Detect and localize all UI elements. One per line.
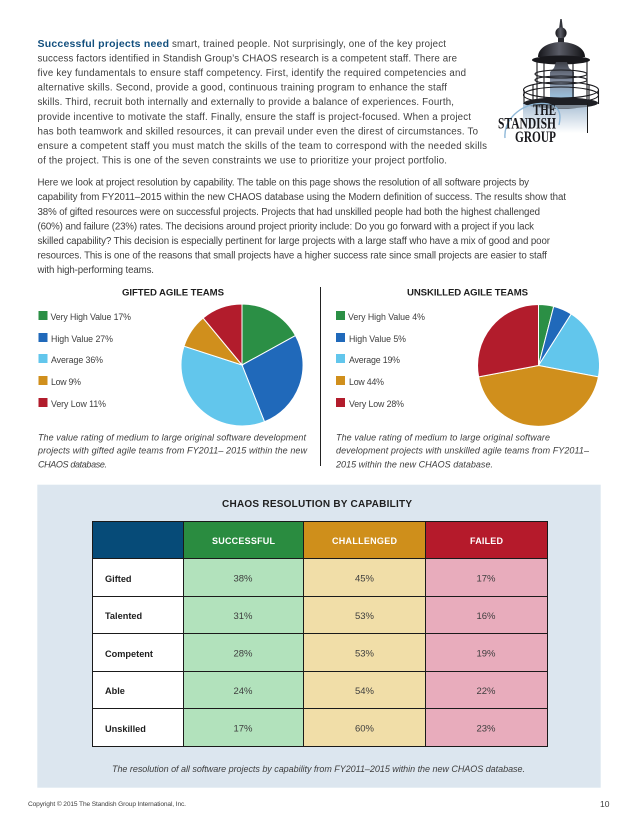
table values: 19% [476, 648, 496, 660]
table values: 28% [233, 648, 253, 660]
caption: unskilled: 2015 within the new CHAOS database. [335, 460, 493, 470]
caption: gifted: projects with gifted agile teams from FY2011– 2015 within the new [37, 446, 308, 456]
text block: intro paragraph: Successful projects need [38, 38, 169, 50]
footer: copyright: Copyright © 2015 The Standish Group International, Inc. [28, 800, 186, 808]
panel: CHAOS resolution by capability [37, 485, 601, 788]
table values: 53% [355, 611, 375, 622]
legend: unskilled: Very Low 28% [349, 399, 404, 409]
text block: intro paragraph: alternative skills. Second, provide a good, continuous training program to enhance the staff [38, 82, 447, 94]
text block: intro paragraph: provide incentive to motivate the staff. Finally, ensure the staff is project-focused. When a project [38, 112, 471, 123]
table header: FAILED [470, 536, 504, 546]
table values: 53% [355, 648, 375, 660]
caption: unskilled [335, 432, 590, 470]
legend: unskilled: Average 19% [349, 355, 400, 365]
table values [233, 574, 496, 734]
text block: capability paragraph: 38% of gifted resources were on successful projects. Projects that had unskilled people had both the highest challenged [38, 207, 540, 218]
legend: unskilled: Very High Value 4% [348, 312, 425, 322]
text block: intro paragraph: smart, trained people. Not surprisingly, one of the key project [172, 39, 446, 50]
row labels [105, 574, 153, 734]
text block: capability paragraph: with high-performing teams. [36, 265, 154, 276]
text block: capability paragraph: (60%) and failure (23%) rates. The decisions around project priority include: Do you go forward with a project if you lack [38, 222, 534, 232]
table: resolution by capability [92, 522, 548, 746]
table values: 23% [476, 724, 496, 734]
text block: capability paragraph: Here we look at project resolution by capability. The table on this page shows the resolution of all software projects by [38, 178, 529, 188]
row labels: Competent [105, 649, 153, 659]
table values: 54% [355, 686, 375, 697]
footer: page number: 10 [600, 799, 610, 809]
legend: unskilled [336, 311, 425, 409]
table values: 31% [233, 611, 253, 622]
caption: unskilled: The value rating of medium to large original software [336, 432, 550, 442]
caption: gifted [37, 432, 308, 470]
table values: 22% [476, 686, 496, 697]
icon: Standish Group lighthouse logo: GROUP [515, 129, 556, 146]
panel: gifted agile teams [37, 288, 308, 470]
table values: 17% [233, 724, 253, 734]
text block: intro paragraph [38, 38, 487, 166]
text block: intro paragraph: five key fundamentals to ensure staff competency. First, identify the required competencies and [38, 68, 466, 79]
table values: 17% [476, 574, 496, 584]
table values: 16% [476, 611, 496, 622]
table values: 38% [233, 574, 253, 584]
table header: CHALLENGED [332, 536, 398, 546]
legend: unskilled: High Value 5% [349, 334, 406, 344]
row labels: Unskilled [105, 724, 146, 734]
legend: gifted [38, 311, 131, 409]
legend: gifted: Low 9% [51, 377, 81, 387]
heading: unskilled agile teams: UNSKILLED AGILE TEAMS [407, 288, 529, 298]
text block: intro paragraph: of the project. This is one of the seven constraints we use to prioritize your project portfolio. [38, 156, 447, 166]
caption: gifted: CHAOS database. [38, 460, 107, 470]
legend: gifted: Very High Value 17% [50, 312, 131, 322]
panel: unskilled agile teams [335, 288, 599, 470]
table header [212, 536, 504, 546]
legend: unskilled: Low 44% [349, 377, 384, 387]
legend: gifted: Very Low 11% [51, 399, 106, 409]
heading: gifted agile teams: GIFTED AGILE TEAMS [122, 288, 225, 298]
icon: Standish Group lighthouse logo: THE [533, 102, 556, 119]
icon: Standish Group lighthouse logo [498, 19, 598, 146]
heading: table title: CHAOS RESOLUTION BY CAPABILITY [222, 499, 412, 510]
table header: SUCCESSFUL [212, 536, 276, 546]
row labels: Able [105, 686, 125, 696]
row labels: Gifted [105, 574, 132, 584]
pie chart: unskilled [478, 304, 599, 426]
icon: Standish Group lighthouse logo: STANDISH [498, 116, 556, 132]
table values: 60% [355, 724, 375, 734]
table values: 24% [233, 686, 253, 697]
legend: gifted: High Value 27% [51, 334, 113, 344]
text block: intro paragraph: success factors identified in Standish Group’s CHAOS research is a competent staff. There are [38, 54, 457, 64]
text block: capability paragraph: resources. This is one of the reasons that small projects have a higher success rate since small projects are easier to staff [38, 250, 547, 262]
legend: gifted: Average 36% [51, 355, 103, 365]
caption: gifted: The value rating of medium to large original software development [38, 432, 306, 442]
text block: intro paragraph: skills. Third, recruit both internally and externally to provide a balance of experiences. Fourth, [38, 97, 454, 108]
text block: capability paragraph: capability from FY2011–2015 within the new CHAOS database using the Modern definition of success. The results show that [38, 192, 566, 203]
caption: table: The resolution of all software projects by capability from FY2011–2015 within the new CHAOS database. [112, 764, 525, 774]
text block: capability paragraph: skilled capability? This decision is especially pertinent for large projects with a large staff who have a mix of good and poor [38, 236, 551, 247]
caption: unskilled: development projects with unskilled agile teams from FY2011– [336, 446, 590, 456]
table values: 45% [355, 574, 375, 584]
text block: intro paragraph: has both teamwork and skilled resources, it can prevail under even the direst of circumstances. To [38, 126, 478, 138]
text block: intro paragraph: ensure a competent staff you must match the skills of the team to correspond with the needed skills [38, 141, 487, 152]
text block: capability paragraph [36, 178, 566, 276]
pie chart: gifted [181, 304, 303, 426]
row labels: Talented [105, 611, 142, 621]
